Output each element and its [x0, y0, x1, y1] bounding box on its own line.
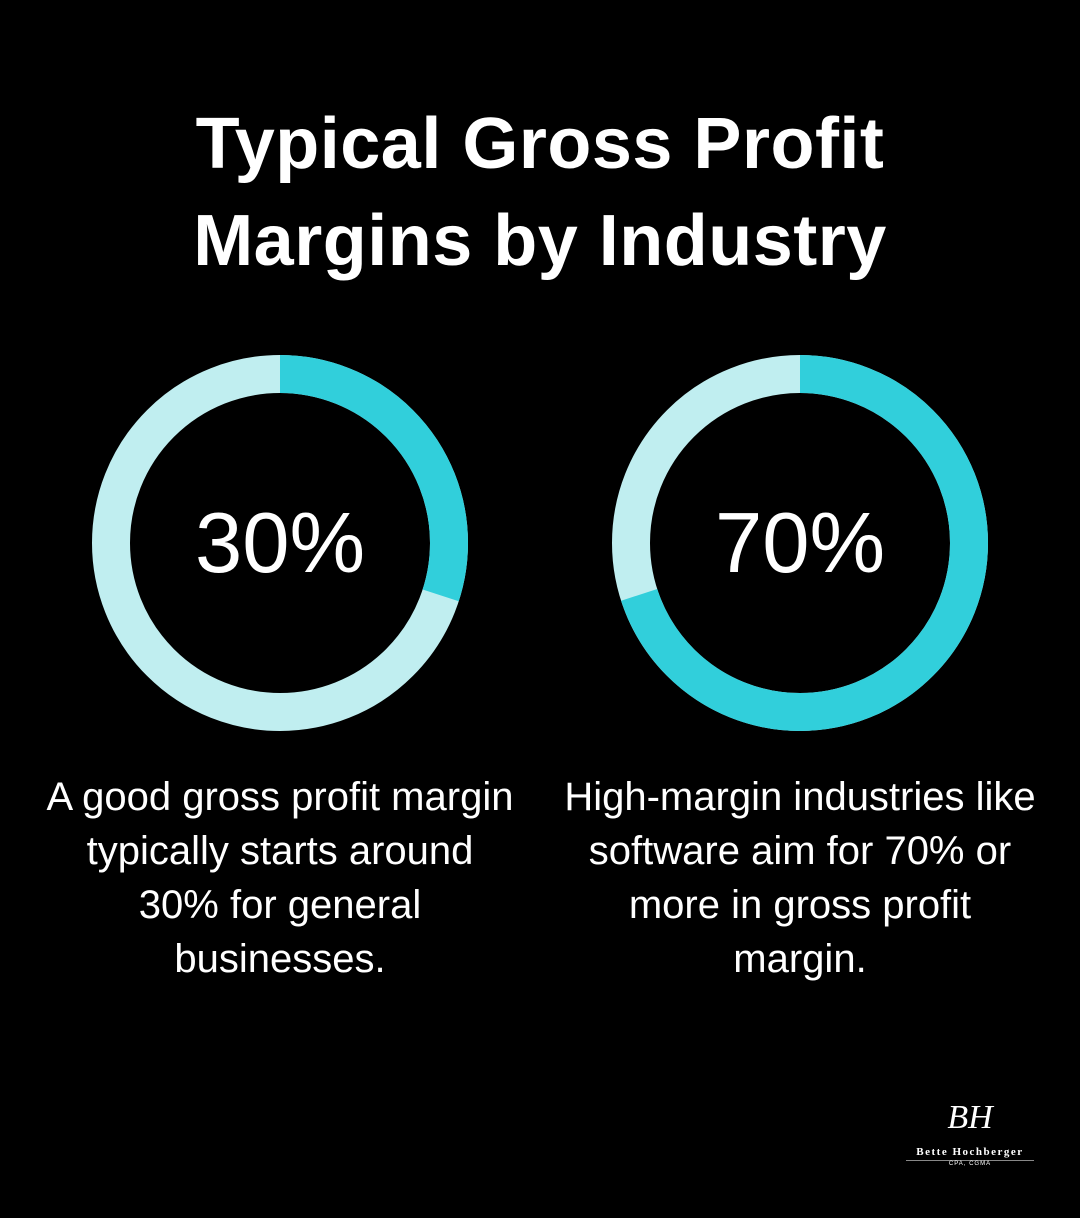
logo: Bette Hochberger	[916, 1146, 1024, 1158]
title: Margins by Industry	[193, 201, 887, 281]
text: right description: more in gross profit	[629, 883, 971, 927]
title: Typical Gross Profit	[196, 104, 884, 184]
text: left description: A good gross profit margin	[47, 775, 513, 819]
text: right description: software aim for 70% or	[589, 829, 1011, 873]
chart: 70% donut: 70%	[715, 496, 885, 591]
logo	[906, 1099, 1034, 1167]
text: right description: margin.	[733, 937, 867, 981]
title	[193, 104, 887, 281]
text: right description	[564, 775, 1036, 981]
text: left description: 30% for general	[139, 883, 421, 927]
chart: 70% donut	[612, 355, 988, 731]
logo: CPA, CGMA	[949, 1161, 991, 1167]
chart: 30% donut	[92, 355, 468, 731]
text: left description	[46, 775, 513, 981]
text: left description: businesses.	[174, 937, 386, 981]
logo: BH	[947, 1099, 993, 1136]
chart: 30% donut: 30%	[195, 496, 365, 591]
text: left description: typically starts around	[87, 829, 473, 873]
text: right description: High-margin industries like	[564, 775, 1036, 819]
